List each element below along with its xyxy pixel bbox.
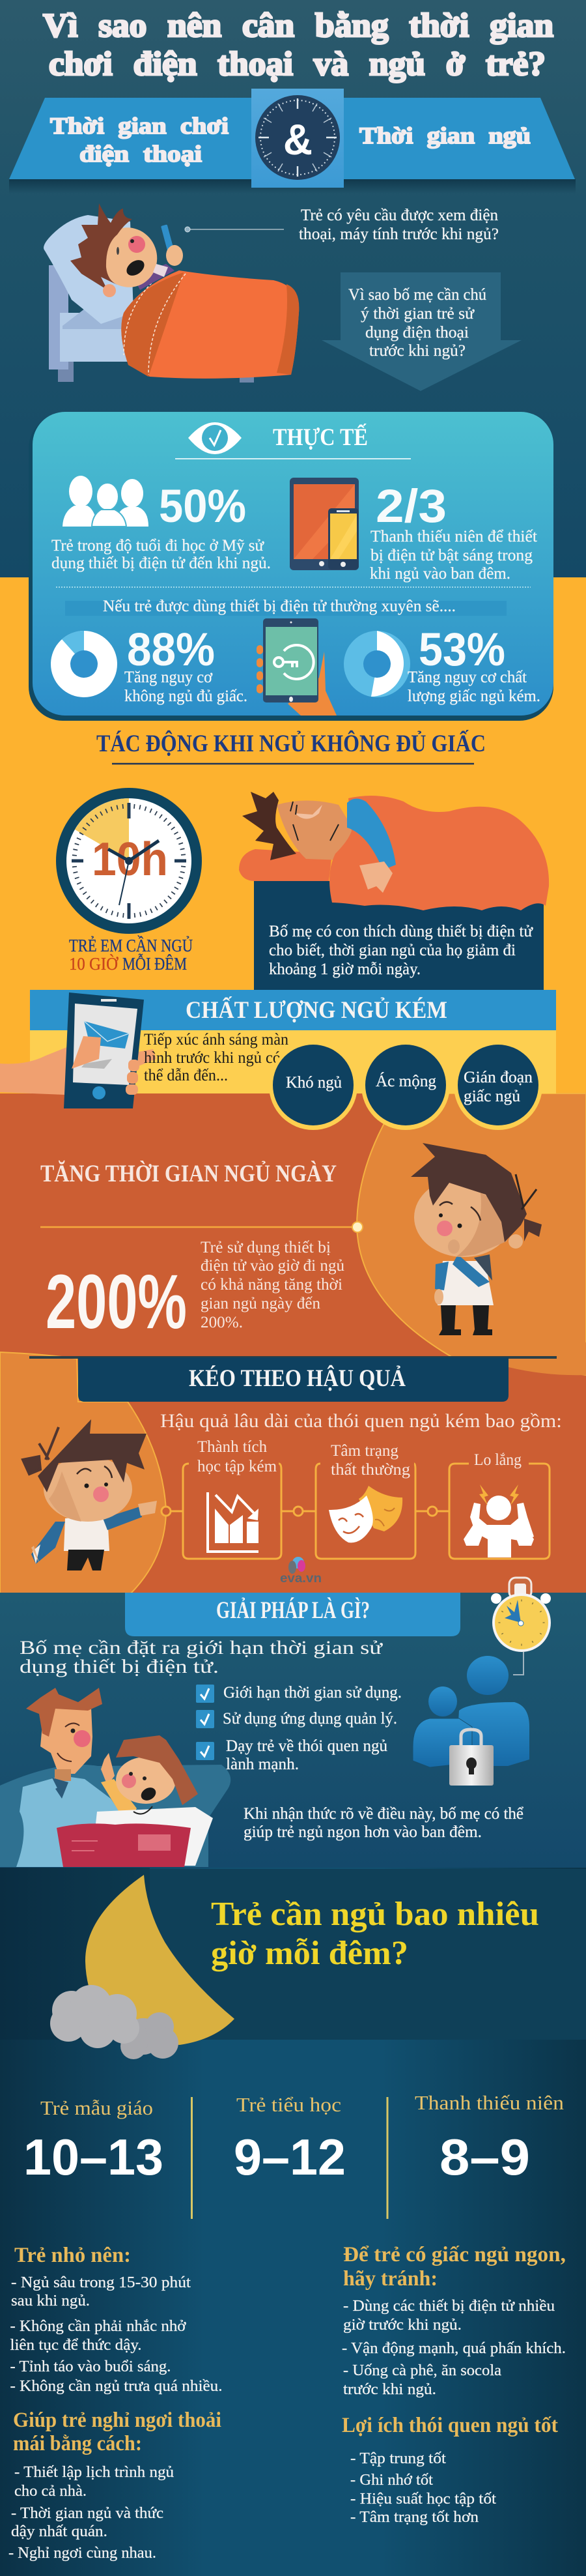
box: poor academic performance	[183, 1438, 281, 1559]
connectors between boxes	[161, 1507, 449, 1516]
heading: increased daytime sleep: TĂNG THỜI GIAN NGỦ NGÀY	[40, 1160, 337, 1187]
box: poor academic performance: học tập kém	[197, 1458, 277, 1475]
check item 3: lành mạnh.	[226, 1756, 299, 1773]
clock caption: TRẺ EM CẦN NGỦ	[69, 935, 193, 955]
panel: facts	[29, 412, 553, 721]
list: benefits of good sleep	[342, 2414, 558, 2526]
circle: interrupted sleep	[454, 1041, 542, 1130]
text: long-term consequences: Hậu quả lâu dài của thói quen ngủ kém bao gồm:	[160, 1410, 562, 1432]
list: things to avoid	[342, 2243, 566, 2398]
dividers	[191, 2097, 387, 2219]
heading: CHẤT LƯỢNG NGỦ KÉM	[186, 996, 447, 1024]
check item 1: Giới hạn thời gian sử dụng.	[223, 1684, 402, 1701]
box: mood swings	[316, 1442, 415, 1559]
stat: 53%	[408, 624, 540, 705]
arrow callout: dụng điện thoại	[365, 324, 469, 341]
question text: Trẻ có yêu cầu được xem điện	[301, 207, 498, 224]
list: help children rest: mái bằng cách:	[13, 2432, 142, 2455]
night section background	[0, 1868, 586, 2576]
icon: clock with ampersand	[255, 95, 340, 180]
text: 200% explanation: gian ngủ ngày đến	[201, 1295, 321, 1312]
age group: teenagers: 8–9	[440, 2128, 530, 2186]
logo: eva.vn	[280, 1557, 322, 1585]
list: things to avoid: - Dùng các thiết bị điện tử nhiều	[343, 2298, 555, 2315]
text: 200% explanation: 200%.	[201, 1314, 243, 1331]
question text	[299, 207, 499, 243]
title	[43, 7, 553, 83]
chart: 88% donut	[51, 631, 117, 697]
icon: hand holding phone	[0, 992, 156, 1108]
icon: three people	[63, 476, 148, 527]
callout line	[185, 227, 284, 232]
list: benefits of good sleep: Lợi ích thói quen ngủ tốt	[342, 2414, 558, 2437]
header: consequences: KÉO THEO HẬU QUẢ	[189, 1365, 406, 1392]
text block: hình trước khi ngủ có	[144, 1049, 281, 1067]
panel: sleeping person	[239, 792, 549, 990]
header: solutions	[125, 1593, 460, 1636]
question text: thoại, máy tính trước khi ngủ?	[299, 225, 499, 243]
arrow callout: trước khi ngủ?	[369, 342, 466, 360]
list: help children rest: - Thiết lập lịch trình ngủ	[14, 2464, 174, 2481]
list: young children should: Trẻ nhỏ nên:	[14, 2244, 131, 2267]
stat: 88%	[124, 624, 247, 705]
list: help children rest: - Thời gian ngủ và thức	[11, 2505, 163, 2522]
heading: effects of lack of sleep: TÁC ĐỘNG KHI NGỦ KHÔNG ĐỦ GIẤC	[96, 729, 486, 757]
stat: 88%: không ngủ đủ giấc.	[124, 687, 247, 705]
list: things to avoid: giờ trước khi ngủ.	[343, 2317, 462, 2334]
stat: 2/3: 2/3	[376, 481, 447, 532]
age group: preschool	[23, 2096, 163, 2186]
stat: 2/3: khi ngủ vào ban đêm.	[370, 565, 510, 583]
list: help children rest	[8, 2409, 221, 2562]
box: mood swings: thất thường	[331, 1461, 411, 1479]
stat: 50%: Trẻ trong độ tuổi đi học ở Mỹ sử	[51, 537, 264, 555]
icon: eye with check	[188, 422, 242, 454]
age group: teenagers	[415, 2091, 565, 2186]
chart: 53% donut	[344, 631, 410, 697]
stat: 53%: 53%	[419, 624, 505, 676]
stat: 200%: 200%	[46, 1259, 187, 1345]
list: things to avoid: - Vận động mạnh, quá phấn khích.	[342, 2340, 566, 2357]
text: 200% explanation: điện tử vào giờ đi ngủ	[201, 1257, 344, 1275]
stat: 53%: lượng giấc ngủ kém.	[408, 687, 540, 705]
box: poor academic performance: Thành tích	[197, 1438, 267, 1456]
icon: tablet and phone	[290, 478, 359, 570]
box: anxiety: Lo lắng	[474, 1451, 522, 1469]
stat: 50%: 50%	[159, 481, 246, 532]
icon: falling bar chart	[206, 1492, 258, 1553]
list: help children rest: Giúp trẻ nghỉ ngơi thoải	[13, 2409, 221, 2432]
icon: clock 10h: 10h	[92, 833, 168, 886]
list: benefits of good sleep: - Hiệu suất học tập tốt	[350, 2491, 496, 2508]
solution section background	[0, 1593, 586, 1868]
check item 3: Dạy trẻ về thói quen ngủ	[226, 1737, 387, 1755]
ribbon banner: Thời gian chơi	[50, 113, 229, 139]
age group: primary school	[234, 2093, 346, 2186]
stat: 50%	[51, 481, 271, 572]
text: set limits: dụng thiết bị điện tử.	[20, 1656, 219, 1677]
list: benefits of good sleep: - Ghi nhớ tốt	[350, 2472, 433, 2489]
heading: how much sleep: Trẻ cần ngủ bao nhiêu	[211, 1896, 539, 1933]
list: help children rest: - Nghỉ ngơi cùng nhau.	[8, 2545, 156, 2562]
circle: hard to sleep: Khó ngủ	[286, 1074, 342, 1092]
arrow callout: ý thời gian trẻ sử	[361, 305, 475, 323]
text: set limits: Bố mẹ cần đặt ra giới hạn thời gian sử	[20, 1637, 384, 1658]
checklist	[196, 1684, 402, 1773]
title: chơi điện thoại và ngủ ở trẻ?	[49, 46, 546, 83]
list: things to avoid: trước khi ngủ.	[343, 2381, 436, 2398]
clock caption	[69, 935, 193, 974]
top background	[0, 0, 586, 577]
text: closing note	[244, 1805, 524, 1841]
ribbon banner	[9, 89, 576, 194]
stat: 2/3: Thanh thiếu niên để thiết	[370, 528, 537, 545]
icon: parents and lock	[413, 1656, 529, 1786]
stat: 2/3: bị điện tử bật sáng trong	[370, 547, 533, 564]
circle: interrupted sleep: giấc ngủ	[464, 1088, 521, 1105]
text: 200% explanation: Trẻ sử dụng thiết bị	[201, 1239, 331, 1256]
circle: interrupted sleep: Gián đoạn	[464, 1069, 533, 1086]
list: benefits of good sleep: - Tâm trạng tốt hơn	[350, 2509, 479, 2526]
illustration: father and son reading	[0, 1688, 230, 1867]
icon: phone in hand with key	[257, 618, 337, 716]
clock caption: MỖI ĐÊM	[122, 953, 187, 974]
title: Vì sao nên cân bằng thời gian	[43, 7, 553, 44]
text block: khoảng 1 giờ mỗi ngày.	[269, 961, 421, 978]
text block: cho biết, thời gian ngủ của họ giảm đi	[269, 942, 516, 959]
check item 2: Sử dụng ứng dụng quản lý.	[223, 1710, 397, 1728]
list: young children should: liên tục để thức dậy.	[10, 2337, 142, 2354]
icon: stopwatch	[491, 1578, 551, 1675]
header: solutions: GIẢI PHÁP LÀ GÌ?	[216, 1597, 370, 1624]
stat: 88%: 88%	[127, 624, 215, 676]
list: young children should: - Tỉnh táo vào buổi sáng.	[10, 2358, 171, 2375]
list: young children should: sau khi ngủ.	[11, 2293, 90, 2309]
list: benefits of good sleep: - Tập trung tốt	[350, 2450, 446, 2467]
subheading band: Nếu trẻ được dùng thiết bị điện tử thường xuyên sẽ....	[103, 598, 456, 615]
illustration: sad boy thinking	[411, 1143, 542, 1335]
circle: nightmares	[361, 1041, 450, 1130]
box: mood swings: Tâm trạng	[331, 1442, 398, 1460]
yellow section background	[0, 577, 586, 1099]
orange section background	[0, 1093, 586, 1593]
header: consequences	[29, 1357, 557, 1402]
text: closing note: Khi nhận thức rõ về điều này, bố mẹ có thể	[244, 1805, 524, 1823]
text: 200% explanation	[201, 1239, 344, 1331]
check item 3	[196, 1737, 387, 1773]
list: help children rest: cho cả nhà.	[14, 2483, 87, 2500]
stat: 50%: dụng thiết bị điện tử đến khi ngủ.	[51, 555, 271, 572]
text: closing note: giúp trẻ ngủ ngon hơn vào ban đêm.	[244, 1823, 482, 1841]
text: 200% explanation: có khả năng tăng thời	[201, 1276, 342, 1294]
stat: 53%: Tăng nguy cơ chất	[408, 669, 527, 686]
circle: hard to sleep	[269, 1041, 357, 1130]
arrow callout: Vì sao bố mẹ cần chú	[348, 286, 486, 304]
heading: how much sleep	[211, 1896, 539, 1972]
logo: eva.vn: eva.vn	[280, 1572, 322, 1585]
age group: teenagers: Thanh thiếu niên	[415, 2091, 565, 2114]
icon: clock 10h	[56, 788, 202, 934]
age group: preschool: Trẻ mẫu giáo	[40, 2096, 153, 2119]
heading: THỰC TẾ	[273, 423, 368, 451]
icon: theater masks	[329, 1486, 402, 1542]
text block	[144, 1031, 288, 1084]
text: set limits	[20, 1637, 384, 1677]
icon: moon and clouds	[50, 1875, 234, 2059]
list: young children should	[10, 2244, 223, 2395]
age group: preschool: 10–13	[23, 2128, 163, 2186]
clock caption: 10 GIỜ	[69, 954, 119, 974]
heading: how much sleep: giờ mỗi đêm?	[211, 1935, 408, 1972]
stat: 2/3	[370, 481, 537, 583]
box: anxiety	[449, 1451, 550, 1559]
icon: stressed person	[464, 1484, 534, 1557]
ribbon banner: điện thoại	[79, 141, 202, 167]
list: things to avoid: hãy tránh:	[343, 2267, 438, 2291]
list: young children should: - Không cần phải nhắc nhở	[10, 2318, 186, 2335]
text block	[269, 923, 533, 978]
list: things to avoid: - Uống cà phê, ăn socola	[343, 2362, 501, 2379]
panel: poor sleep quality	[0, 990, 556, 1130]
ribbon banner: Thời gian ngủ	[359, 123, 531, 149]
arrow callout	[322, 272, 522, 391]
connector line with dot	[40, 1222, 363, 1232]
text block: thể dẫn đến...	[144, 1067, 228, 1084]
illustration: boy in bed with phone	[44, 203, 299, 383]
text block: Tiếp xúc ánh sáng màn	[144, 1031, 288, 1049]
list: young children should: - Ngủ sâu trong 15-30 phút	[11, 2274, 191, 2291]
illustration: boy pointing	[23, 1419, 157, 1570]
list: young children should: - Không cần ngủ trưa quá nhiều.	[10, 2378, 223, 2395]
age group: primary school: 9–12	[234, 2128, 346, 2186]
text block: Bố mẹ có con thích dùng thiết bị điện tử	[269, 923, 533, 940]
age group: primary school: Trẻ tiểu học	[236, 2093, 341, 2116]
stat: 88%: Tăng nguy cơ	[124, 669, 213, 686]
circle: nightmares: Ác mộng	[376, 1072, 436, 1090]
list: things to avoid: Để trẻ có giấc ngủ ngon,	[343, 2243, 566, 2266]
list: help children rest: dậy nhất quán.	[11, 2523, 107, 2540]
icon: clock with ampersand: &	[283, 115, 313, 164]
